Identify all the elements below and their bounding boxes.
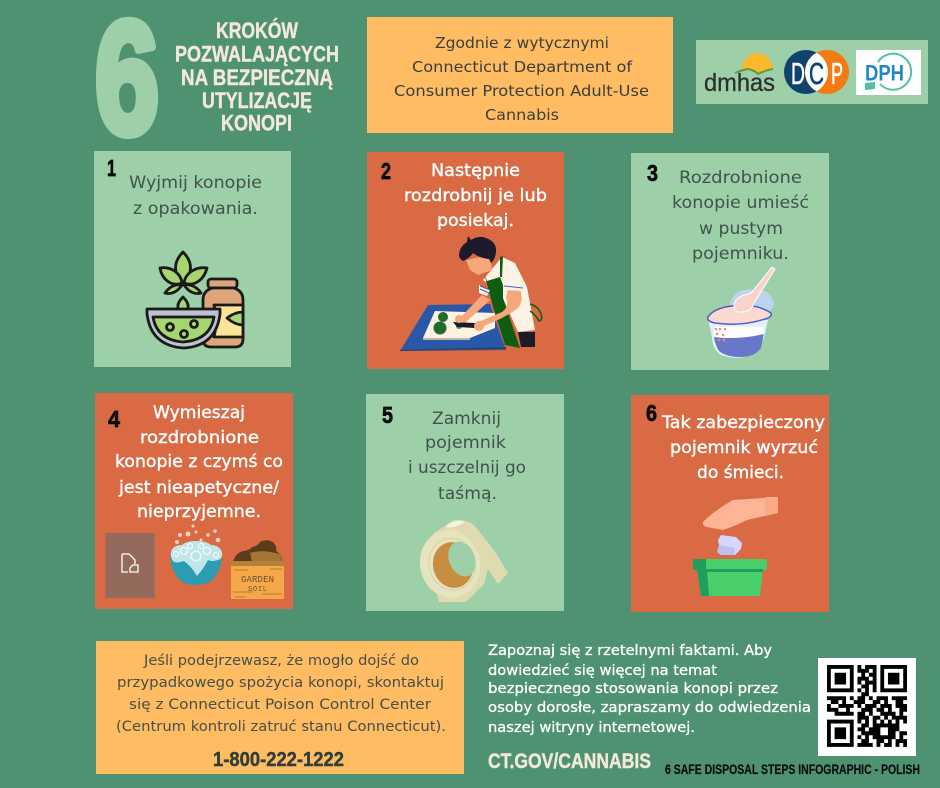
text block: learn more [488, 643, 811, 736]
title: KONOPI [221, 110, 292, 136]
panel: step 5: Zamknij [432, 409, 501, 429]
website link: CT.GOV/CANNABIS [488, 750, 651, 773]
panel: logos [696, 40, 928, 104]
QR code [818, 658, 916, 756]
panel: step 3: 3 [647, 160, 658, 186]
panel: step 6: Tak zabezpieczony [661, 413, 825, 433]
panel: poison control: Jeśli podejrzewasz, że mogło dojść do [143, 653, 419, 669]
panel: step 3: pojemniku. [692, 244, 789, 264]
panel: step 3: konopie umieść [672, 193, 809, 213]
phone number: 1-800-222-1222 [213, 749, 344, 771]
panel: step 2: posiekaj. [437, 211, 514, 231]
text block: learn more: osoby dorosłe, zapraszamy do odwiedzenia [488, 700, 811, 716]
panel: step 3 [631, 153, 829, 370]
text block: learn more: dowiedzieć się więcej na temat [488, 663, 718, 679]
panel: step 5: taśmą. [438, 484, 497, 504]
panel: guidelines note [367, 17, 673, 133]
panel: step 4: rozdrobnione [140, 428, 259, 448]
panel: guidelines note: Connecticut Department of [412, 58, 633, 76]
title: UTYLIZACJĘ [202, 88, 312, 113]
panel: step 4 [95, 393, 293, 609]
icon: soapy basin [170, 524, 222, 585]
panel: step 4: jest nieapetyczne/ [118, 478, 279, 498]
panel: poison control [96, 641, 464, 774]
panel: guidelines note: Cannabis [485, 106, 559, 124]
logo: DCP: C [809, 56, 824, 91]
logo: DPH: DPH [865, 60, 904, 86]
panel: step 6: pojemnik wyrzuć [670, 438, 818, 458]
icon: yogurt cup with spoon [708, 267, 775, 358]
panel: guidelines note: Zgodnie z wytycznymi [435, 34, 609, 52]
logo: dmhas: dmhas [704, 69, 775, 97]
logo: DPH [856, 50, 921, 95]
panel: step 5: 5 [382, 402, 393, 428]
title: NA BEZPIECZNĄ [181, 65, 333, 90]
icon: garden soil bag: GARDEN [241, 575, 274, 585]
panel: step 4: nieprzyjemne. [137, 502, 261, 522]
panel: step 2: Następnie [431, 161, 520, 181]
panel: step 4: konopie z czymś co [115, 452, 283, 472]
logo: dmhas [704, 53, 775, 97]
panel: step 1 [94, 151, 291, 367]
panel: step 4: 4 [108, 406, 120, 432]
text block: learn more: Zapoznaj się z rzetelnymi faktami. Aby [488, 643, 772, 659]
panel: step 1: z opakowania. [133, 199, 258, 219]
logo: DCP: P [831, 56, 843, 91]
panel: step 5: i uszczelnij go [408, 458, 526, 478]
text block: learn more: bezpiecznego stosowania konopi przez [488, 681, 778, 697]
logo: DCP [784, 50, 849, 94]
panel: step 2 [367, 152, 564, 369]
panel: step 6 [631, 395, 829, 612]
title [175, 18, 339, 136]
panel: step 2: rozdrobnij je lub [404, 186, 547, 206]
icon: roll of tape [414, 519, 508, 603]
title: POZWALAJĄCYCH [175, 42, 339, 66]
icon: herb bowl and jar [147, 252, 243, 348]
panel: step 5 [366, 394, 564, 611]
panel: step 1: Wyjmij konopie [129, 173, 262, 193]
icon: hand dropping trash into bin [693, 497, 778, 596]
icon: garden soil bag [231, 540, 284, 599]
panel: step 2: 2 [381, 158, 391, 184]
panel: step 1: 1 [107, 155, 116, 181]
panel: step 6: 6 [646, 400, 657, 426]
panel: step 5: pojemnik [425, 433, 506, 453]
panel: step 3: w pustym [699, 219, 783, 239]
text block: learn more: naszej witryny internetowej. [488, 720, 695, 736]
panel: guidelines note: Consumer Protection Adult-Use [394, 82, 649, 100]
panel: step 6: do śmieci. [697, 463, 784, 483]
title: KROKÓW [216, 18, 298, 43]
icon: garden soil bag: SOIL [248, 586, 267, 594]
panel: poison control: przypadkowego spożycia konopi, skontaktuj [117, 675, 444, 691]
logo: DCP: D [791, 56, 805, 91]
panel: step 3: Rozdrobnione [679, 168, 802, 188]
panel: step 4: Wymieszaj [153, 403, 245, 423]
icon: document placeholder [106, 533, 154, 598]
panel: poison control: (Centrum kontroli zatruć stanu Connecticut). [116, 719, 446, 735]
icon: person chopping herbs [400, 236, 542, 351]
panel: poison control: się z Connecticut Poison Control Center [129, 697, 431, 713]
